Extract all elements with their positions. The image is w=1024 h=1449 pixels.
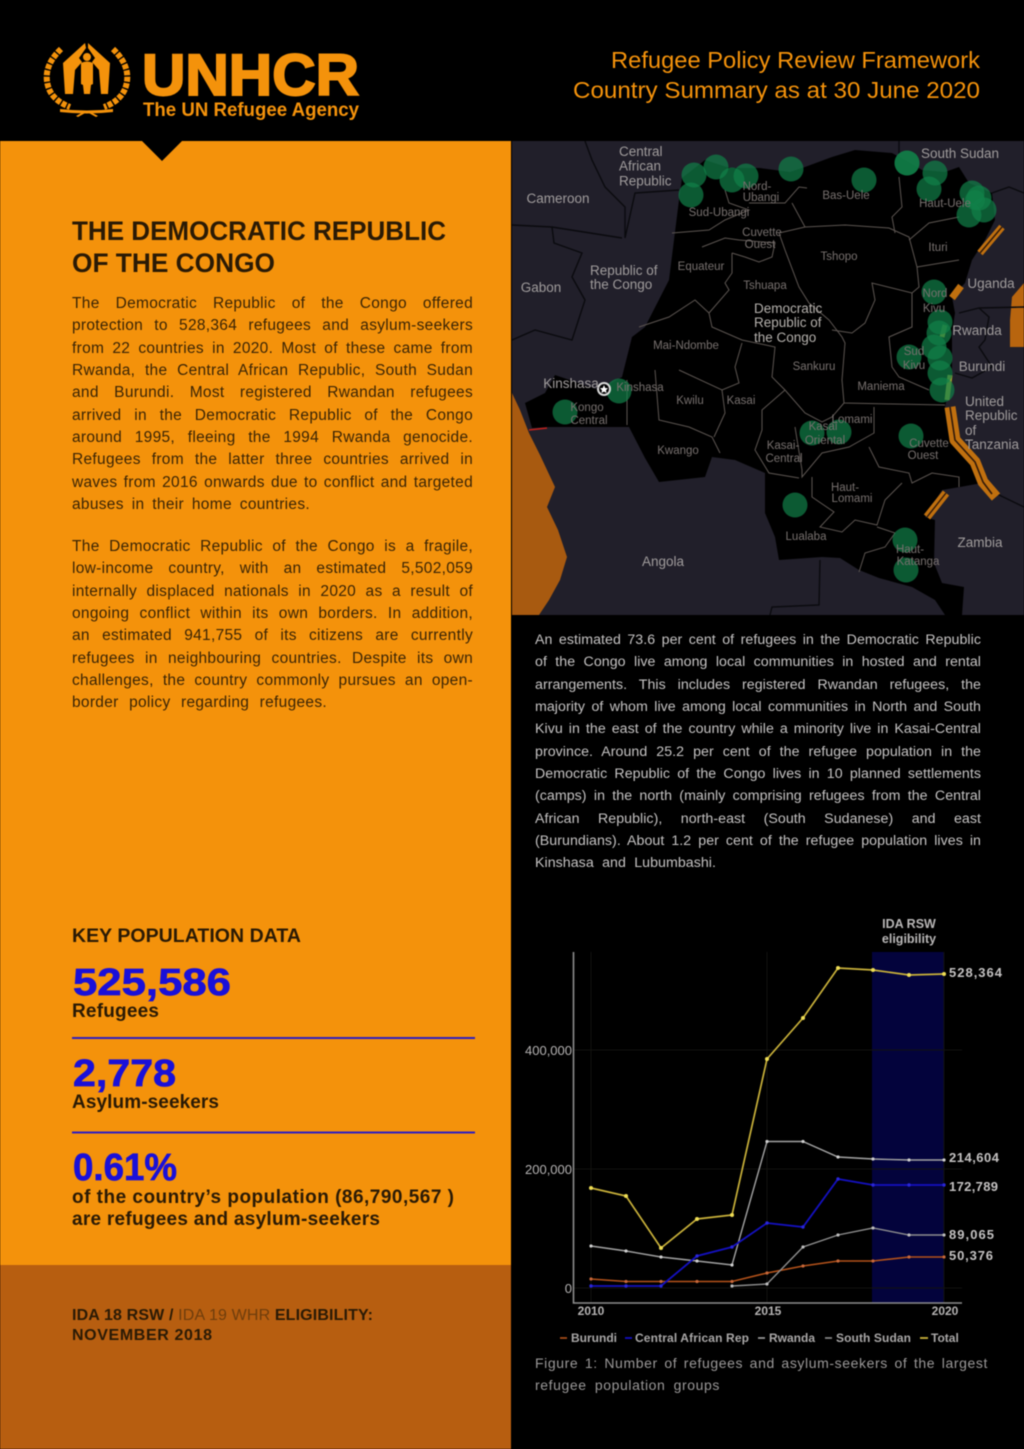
- text block: where refugees live: arrangements. This includes registered Rwandan refugees, the: [535, 677, 981, 693]
- water: ocean and lakes: [512, 283, 1024, 615]
- text block: introduction paragraph two: internally displaced nationals in 2020 as a result of: [72, 583, 473, 600]
- UNHCR logo: [42, 42, 360, 121]
- country labels: United: [965, 394, 1004, 409]
- province labels: Nord: [923, 288, 947, 300]
- province labels: Haut-: [896, 544, 924, 556]
- text block: introduction paragraph one: around 1995, fleeing the 1994 Rwanda genocide.: [72, 429, 473, 446]
- series: Central African Republic: [589, 1177, 946, 1288]
- band label: [882, 917, 936, 946]
- country labels: Zambia: [957, 535, 1003, 550]
- panel: eligibility footer: [0, 1265, 511, 1449]
- province labels: [570, 181, 971, 568]
- text block: introduction paragraph one: from 22 countries in 2020. Most of these came from: [72, 340, 473, 357]
- legend: Total: [931, 1331, 959, 1345]
- province labels: Kinshasa: [616, 382, 664, 394]
- province labels: Kasai-: [767, 440, 799, 452]
- grid lines: [573, 952, 962, 1303]
- end-of-line value labels: 172,789: [949, 1179, 998, 1194]
- refugee location circles: [552, 150, 996, 582]
- series: Rwanda: [589, 1140, 946, 1267]
- province labels: Sankuru: [793, 361, 835, 373]
- DRC country shape: [525, 150, 995, 615]
- province labels: Lomami: [832, 414, 872, 426]
- country labels: Gabon: [521, 280, 561, 295]
- stat: share of population: [72, 1147, 454, 1230]
- stat: refugees: Refugees: [72, 1001, 159, 1022]
- logo wordmark: UNHCR: [142, 43, 359, 108]
- figure caption: Figure 1: Number of refugees and asylum-seekers of the largest: [535, 1355, 988, 1371]
- text block: introduction paragraph one: The Democratic Republic of the Congo offered: [72, 295, 473, 312]
- text block: introduction paragraph one: [72, 295, 473, 513]
- text block: where refugees live: of the Congo live among local communities in hosted and rental: [535, 654, 981, 670]
- neighbouring country borders: [512, 141, 1024, 615]
- text block: introduction paragraph one: Refugees from the latter three countries arrived in: [72, 451, 473, 468]
- stat: asylum-seekers: Asylum-seekers: [72, 1092, 219, 1113]
- text block: where refugees live: (Burundians). About 1.2 per cent of the refugee population lives in: [535, 833, 981, 849]
- text block: introduction paragraph two: refugees in neighbouring countries. Despite its own: [72, 650, 473, 667]
- heading: country name: [72, 216, 446, 278]
- end-of-line value labels: 528,364: [949, 965, 1003, 980]
- country labels: Uganda: [967, 276, 1015, 291]
- header title: Refugee Policy Review Framework: [611, 47, 981, 73]
- country labels: Republic: [619, 174, 672, 188]
- province labels: Kasai: [727, 395, 755, 407]
- country labels: South Sudan: [921, 146, 999, 161]
- stat: refugees: 525,586: [73, 962, 231, 1004]
- province labels: Tshuapa: [743, 280, 787, 292]
- header title: Country Summary as at 30 June 2020: [573, 77, 980, 103]
- lakes on the eastern border: [927, 227, 1002, 517]
- country labels: Cameroon: [526, 191, 590, 206]
- province labels: Kivu: [923, 303, 945, 315]
- y axis labels: 200,000: [525, 1162, 572, 1177]
- text block: introduction paragraph one: protection to 528,364 refugees and asylum-seekers: [72, 317, 473, 334]
- province labels: Haut-: [831, 482, 859, 494]
- province labels: Central: [570, 415, 608, 427]
- province labels: Ouest: [745, 239, 776, 251]
- country labels: Republic of: [590, 263, 658, 278]
- province labels: Cuvette: [742, 227, 782, 239]
- line chart: refugee population by origin: [524, 917, 1003, 1346]
- x axis labels: 2015: [755, 1304, 782, 1318]
- country labels: of: [965, 423, 977, 438]
- text block: where refugees live: Kivu in the east of the country while a minority live in Kasai-Central: [535, 721, 981, 737]
- province labels: Kivu: [903, 360, 925, 372]
- header band: [0, 0, 1024, 141]
- country labels: African: [619, 158, 661, 174]
- province boundaries: [627, 177, 959, 572]
- heading: country name: THE DEMOCRATIC REPUBLIC: [72, 216, 446, 246]
- province labels: Katanga: [897, 556, 940, 568]
- eligibility note: [72, 1307, 373, 1344]
- text block: where refugees live: [534, 632, 982, 871]
- province labels: Equateur: [678, 261, 725, 273]
- x axis labels: [578, 1304, 959, 1318]
- end-of-line value labels: 50,376: [949, 1248, 993, 1263]
- province labels: Kwilu: [676, 395, 704, 407]
- province labels: Kasai: [809, 421, 837, 433]
- province labels: Mai-Ndombe: [653, 340, 719, 352]
- stat: asylum-seekers: [72, 1053, 219, 1113]
- figure caption: refugee population groups: [535, 1377, 720, 1393]
- figure caption: [535, 1355, 988, 1394]
- province labels: Maniema: [857, 381, 905, 393]
- text block: introduction paragraph one: waves from 2016 onwards due to conflict and targeted: [72, 474, 473, 491]
- province labels: Sud: [904, 346, 924, 358]
- text block: where refugees live: province. Around 25.2 per cent of the refugee population in the: [535, 744, 981, 760]
- country labels: Angola: [642, 554, 685, 569]
- text block: where refugees live: Democratic Republic of the Congo lives in 10 planned settlements: [535, 766, 981, 782]
- text block: introduction paragraph two: The Democratic Republic of the Congo is a fragile,: [72, 538, 473, 555]
- eligibility note: IDA 18 RSW / IDA 19 WHR ELIGIBILITY:: [72, 1307, 373, 1324]
- legend: Burundi: [571, 1331, 617, 1345]
- country labels: Burundi: [959, 359, 1005, 374]
- eligibility note: NOVEMBER 2018: [72, 1327, 212, 1344]
- province labels: Ouest: [908, 450, 939, 462]
- text block: introduction paragraph one: arrived in the Democratic Republic of the Congo: [72, 407, 473, 424]
- text block: where refugees live: An estimated 73.6 per cent of refugees in the Democratic Republic: [535, 632, 981, 648]
- province labels: Tshopo: [820, 251, 858, 263]
- text block: introduction paragraph two: ongoing conflict within its own borders. In addition,: [72, 605, 473, 622]
- province labels: Lomami: [832, 493, 872, 505]
- text block: where refugees live: majority of whom live among local communities in North and South: [535, 699, 981, 715]
- stat: share of population: 0.61%: [73, 1147, 177, 1189]
- country labels: [521, 144, 1020, 569]
- text block: introduction paragraph two: an estimated 941,755 of its citizens are currently: [72, 627, 473, 644]
- y axis labels: 400,000: [525, 1043, 572, 1058]
- country labels: the Congo: [590, 277, 652, 292]
- end-of-line value labels: 214,604: [949, 1150, 1000, 1165]
- text block: introduction paragraph two: challenges, the country commonly pursues an open-: [72, 672, 473, 689]
- heading: country name: OF THE CONGO: [72, 248, 275, 278]
- RSW eligibility band: [872, 952, 944, 1303]
- legend: Central African Rep: [635, 1331, 749, 1345]
- text block: introduction paragraph one: Rwanda, the Central African Republic, South Sudan: [72, 362, 473, 379]
- logo tagline: The UN Refugee Agency: [143, 100, 359, 121]
- heading: key population data: KEY POPULATION DATA: [72, 925, 301, 947]
- province labels: Haut-Uele: [919, 198, 971, 210]
- text block: where refugees live: Kinshasa and Lubumbashi.: [535, 855, 716, 871]
- province labels: Oriental: [805, 435, 845, 447]
- stat: share of population: are refugees and asylum-seekers: [72, 1209, 380, 1230]
- country labels: Tanzania: [965, 437, 1020, 452]
- legend: South Sudan: [836, 1331, 911, 1345]
- legend: [560, 1331, 959, 1345]
- axes: [574, 952, 962, 1303]
- text block: where refugees live: (camps) in the north (mainly comprising refugees from the Central: [535, 788, 981, 804]
- country labels: the Congo: [754, 330, 816, 345]
- country labels: Central: [619, 144, 663, 159]
- text block: introduction paragraph one: and Burundi. Most registered Rwandan refugees: [72, 384, 473, 401]
- icon: emblem with wreath, hands and person: [47, 43, 127, 117]
- series: Burundi: [589, 1255, 946, 1283]
- province labels: Kwango: [657, 445, 699, 457]
- province labels: Central: [765, 453, 803, 465]
- panel: orange left column: [0, 141, 511, 1265]
- pointer triangle: [142, 141, 182, 161]
- stat: asylum-seekers: 2,778: [73, 1053, 176, 1095]
- stat: refugees: [72, 962, 231, 1022]
- country labels: Kinshasa: [543, 376, 599, 391]
- text block: introduction paragraph two: low-income country, with an estimated 5,502,059: [72, 560, 473, 577]
- province labels: Nord-: [743, 181, 772, 193]
- country labels: Democratic: [754, 301, 823, 316]
- x axis labels: 2010: [578, 1304, 605, 1318]
- legend: Rwanda: [769, 1331, 815, 1345]
- band label: IDA RSW: [882, 917, 936, 931]
- text block: where refugees live: African Republic), north-east (South Sudanese) and east: [535, 811, 981, 827]
- stat: share of population: of the country’s population (86,790,567 ): [72, 1187, 454, 1208]
- key population data: [71, 925, 476, 1344]
- country labels: Rwanda: [952, 323, 1002, 338]
- series: South Sudan: [730, 1226, 946, 1288]
- province labels: Kongo: [570, 402, 604, 414]
- country labels: Republic of: [754, 315, 822, 330]
- icon: Kinshasa capital marker: [598, 383, 610, 395]
- province labels: Bas-Uele: [822, 190, 870, 202]
- province labels: Lualaba: [786, 531, 827, 543]
- text block: introduction paragraph two: [72, 538, 474, 712]
- text block: introduction paragraph two: border policy regarding refugees.: [72, 694, 327, 711]
- band label: eligibility: [882, 932, 936, 946]
- country labels: Republic: [965, 408, 1018, 423]
- x axis labels: 2020: [932, 1304, 959, 1318]
- end-of-line value labels: 89,065: [949, 1227, 994, 1242]
- province labels: Ubangi: [743, 192, 779, 204]
- end-of-line value labels: [949, 965, 1003, 1263]
- map of the Democratic Republic of the Congo: [511, 140, 1024, 616]
- province labels: Sud-Ubangi: [689, 207, 749, 219]
- province labels: Cuvette: [909, 438, 949, 450]
- series: Total: [589, 966, 946, 1250]
- province labels: Ituri: [928, 242, 948, 254]
- coastline marker: [529, 428, 547, 430]
- text block: introduction paragraph one: abuses in their home countries.: [72, 496, 310, 513]
- y axis labels: 0: [565, 1281, 572, 1296]
- header title: [573, 47, 981, 104]
- y axis labels: [525, 1043, 572, 1296]
